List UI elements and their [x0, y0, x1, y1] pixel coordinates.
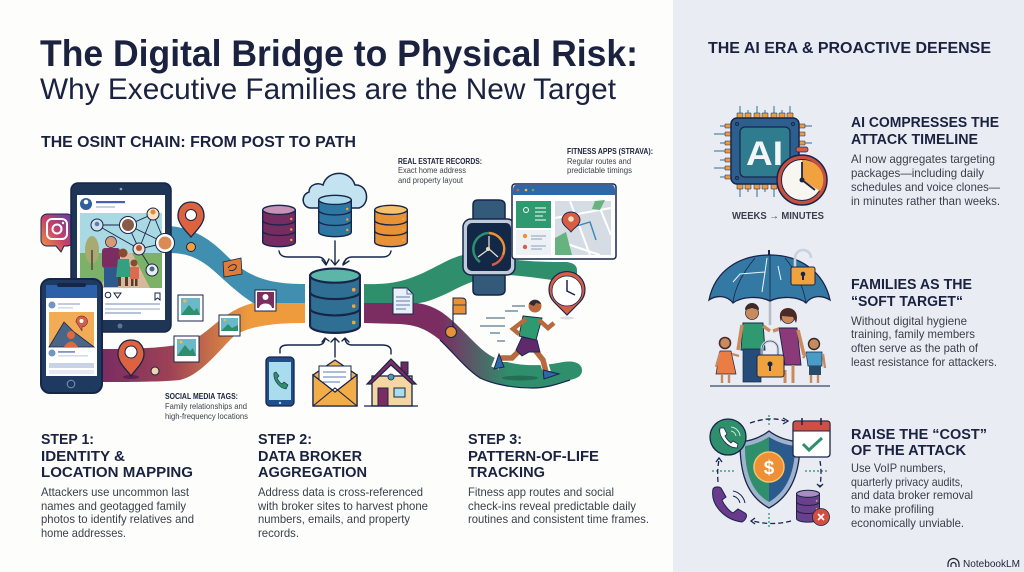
photo scene	[80, 213, 162, 288]
text: families as the soft target: “SOFT TARGET“	[851, 294, 963, 310]
text: raise the cost of the attack	[851, 427, 987, 530]
callout: real estate records	[398, 156, 482, 185]
figure: boy	[803, 338, 825, 383]
step 2 heading: AGGREGATION	[258, 464, 367, 481]
title: Why Executive Families are the New Target	[40, 73, 617, 106]
callout: social media tags: high-frequency locations	[165, 411, 248, 421]
step 3 heading: TRACKING	[468, 464, 545, 481]
icon: database removal	[796, 490, 830, 526]
callout: social media tags	[165, 391, 248, 421]
step 2 body: with broker sites to harvest phone	[257, 499, 428, 513]
callout: social media tags: Family relationships and	[165, 401, 247, 411]
icon: photo thumbnail one	[178, 295, 203, 321]
diagram: OSINT chain flow	[41, 173, 616, 406]
icon: cracked umbrella over family	[709, 250, 830, 386]
step 1 body: names and geotagged family	[41, 499, 186, 513]
icon: envelope	[313, 360, 357, 406]
icon: closed padlock	[757, 341, 784, 377]
step 2 body: records.	[258, 526, 299, 540]
icon: instagram badge	[41, 214, 73, 252]
step 2 body: numbers, emails, and property	[258, 512, 410, 526]
text: families as the soft target: least resistance for attackers.	[851, 355, 997, 369]
icon: shield with dollar and cost-raising cycle	[710, 415, 830, 529]
step 3 body	[468, 485, 649, 526]
icon: location pin upper	[178, 202, 204, 252]
icon: shield: $	[764, 458, 775, 479]
icon: open padlock	[791, 250, 815, 285]
social network graph	[91, 208, 174, 276]
icon: purple phone with signal	[713, 487, 746, 522]
text: families as the soft target: often serve as the path of	[851, 341, 979, 355]
step 1 heading	[41, 431, 193, 481]
icon label: weeks to minutes: WEEKS → MINUTES	[732, 211, 824, 222]
title: The Digital Bridge to Physical Risk:	[40, 33, 638, 74]
icon: smartphone with geotagged photo	[41, 279, 102, 393]
text: raise the cost of the attack: Use VoIP numbers,	[851, 461, 946, 475]
ribbon: green tracking path	[364, 255, 577, 303]
icon: profile card	[255, 290, 276, 311]
title	[40, 33, 638, 106]
panel: AI era background	[673, 0, 1024, 572]
step 3 heading	[468, 431, 599, 481]
arrows into central database from top	[279, 241, 391, 265]
callout: fitness apps: predictable timings	[567, 165, 632, 175]
step 1	[41, 431, 194, 540]
step 2 heading: DATA BROKER	[258, 448, 362, 465]
text: raise the cost of the attack: and data broker removal	[851, 488, 973, 502]
step 1 body	[41, 485, 194, 540]
icon: path flag	[446, 298, 466, 338]
text: AI compresses the attack timeline: schedules and voice clones—	[851, 180, 1000, 194]
icon: orange database	[375, 205, 407, 247]
text: AI compresses the attack timeline: AI now aggregates targeting	[851, 152, 995, 166]
text: raise the cost of the attack: to make profiling	[851, 502, 934, 516]
text: families as the soft target: Without digital hygiene	[851, 314, 967, 328]
step 1 body: photos to identify relatives and	[41, 512, 194, 526]
figure: father	[738, 303, 770, 382]
icon: house	[364, 359, 418, 406]
icon: link chip on path	[223, 258, 242, 277]
icon: AI chip with stopwatch	[714, 106, 827, 205]
callout: fitness apps	[567, 146, 653, 175]
text: AI compresses the attack timeline: packages—including daily	[851, 166, 984, 180]
step 2 heading	[258, 431, 367, 481]
callout: real estate records: Exact home address	[398, 165, 466, 175]
icon: central database	[310, 269, 360, 333]
ribbon: orange to purple path	[102, 303, 305, 382]
section heading: OSINT chain: THE OSINT CHAIN: FROM POST TO PATH	[41, 134, 356, 151]
step 1 heading: LOCATION MAPPING	[41, 464, 193, 481]
step 1 heading: STEP 1:	[41, 431, 94, 448]
step 1 body: Attackers use uncommon last	[41, 485, 190, 499]
step 3	[468, 431, 649, 526]
figure: mother	[773, 308, 804, 383]
step 2	[257, 431, 428, 540]
icon: browser map window	[512, 184, 616, 259]
text: AI compresses the attack timeline: in minutes rather than weeks.	[851, 194, 1000, 208]
text: families as the soft target: FAMILIES AS THE	[851, 277, 972, 293]
step 3 body: routines and consistent time frames.	[468, 512, 649, 526]
step 1 body: home addresses.	[41, 526, 126, 540]
text: AI compresses the attack timeline	[851, 115, 1000, 208]
icon: calendar check	[793, 418, 830, 457]
icon: smartwatch	[463, 200, 518, 295]
icon: blue database	[319, 195, 351, 237]
panel heading: AI era: THE AI ERA & PROACTIVE DEFENSE	[708, 40, 991, 57]
text: AI compresses the attack timeline: AI COMPRESSES THE	[851, 115, 999, 131]
callout: real estate records: and property layout	[398, 175, 464, 185]
icon: purple database	[263, 205, 295, 247]
callout: real estate records: REAL ESTATE RECORDS:	[398, 156, 482, 166]
icon: mobile phone	[266, 357, 294, 406]
icon: clock pin	[549, 272, 585, 320]
icon: runner	[480, 300, 559, 380]
icon: green phone circle	[710, 419, 746, 455]
step 3 body: check-ins reveal predictable daily	[468, 499, 636, 513]
document lines	[396, 288, 413, 309]
step 3 heading: PATTERN-OF-LIFE	[468, 448, 599, 465]
watermark: NotebookLM: NotebookLM	[963, 558, 1020, 570]
text: raise the cost of the attack: quarterly privacy audits,	[851, 475, 963, 489]
text: raise the cost of the attack: economically unviable.	[851, 516, 964, 530]
text: raise the cost of the attack: RAISE THE “COST”	[851, 427, 987, 443]
icon: cloud	[303, 173, 367, 208]
step 2 heading: STEP 2:	[258, 431, 312, 448]
step 3 body: Fitness app routes and social	[468, 485, 614, 499]
arrows into central database from bottom	[280, 338, 391, 357]
step 1 heading: IDENTITY &	[41, 448, 125, 465]
text: raise the cost of the attack: OF THE ATTACK	[851, 443, 967, 459]
step 2 body	[257, 485, 428, 540]
callout: fitness apps: Regular routes and	[567, 156, 631, 166]
figure: girl	[716, 338, 739, 383]
callout: fitness apps: FITNESS APPS (STRAVA):	[567, 146, 653, 156]
icon: tablet with family photo	[71, 183, 174, 332]
icon: photo thumbnail two	[219, 315, 240, 336]
step 3 heading: STEP 3:	[468, 431, 522, 448]
icon: AI chip with stopwatch: AI	[746, 135, 783, 173]
text: AI compresses the attack timeline: ATTACK TIMELINE	[851, 132, 978, 148]
ribbon: blue social path	[170, 226, 305, 303]
text: families as the soft target: training, family members	[851, 327, 975, 341]
text: families as the soft target	[851, 277, 997, 369]
step 2 body: Address data is cross-referenced	[258, 485, 423, 499]
ribbon: purple to green path	[364, 303, 582, 388]
icon: photo thumbnail three	[174, 336, 199, 362]
icon: location pin lower	[118, 340, 159, 379]
icon: document	[393, 288, 413, 314]
callout: social media tags: SOCIAL MEDIA TAGS:	[165, 391, 238, 401]
